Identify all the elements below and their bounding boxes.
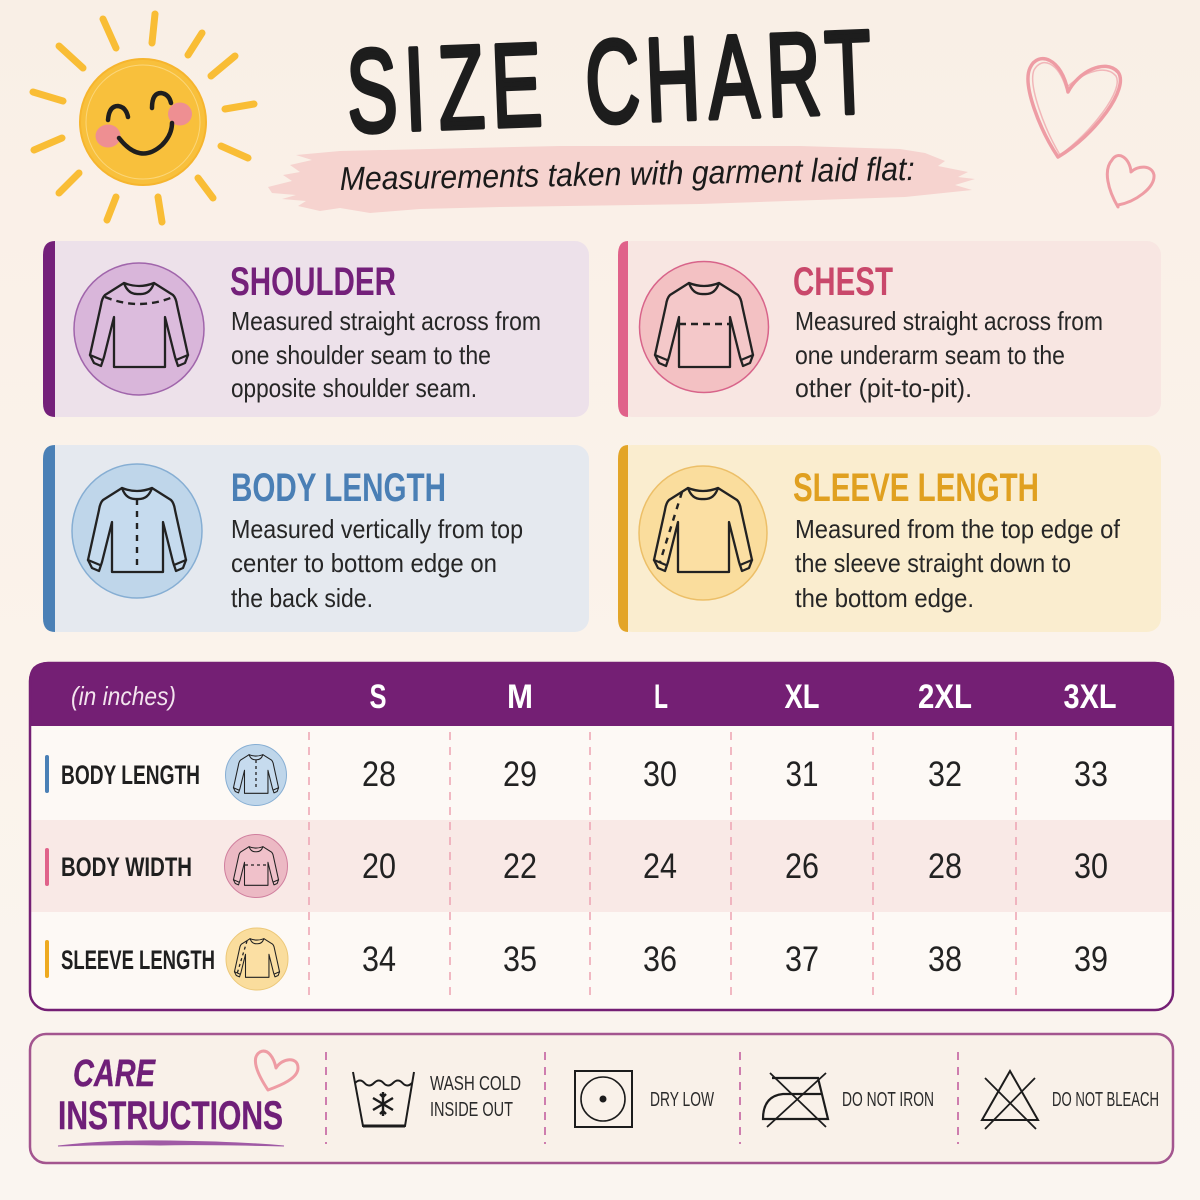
text: chest description: one underarm seam to the (795, 340, 1065, 370)
care: dry low (575, 1071, 714, 1127)
text: body length description: the back side. (231, 583, 373, 613)
text: chest description: Measured straight across from (795, 306, 1103, 336)
text: shoulder description (231, 306, 541, 403)
text: sleeve length description: the sleeve straight down to (795, 548, 1071, 578)
text: body length description (231, 514, 523, 613)
text: shoulder description: Measured straight across from (231, 306, 541, 336)
heading: shoulder: SHOULDER (230, 260, 396, 304)
row: body length: 33 (1074, 755, 1108, 794)
care: wash cold: INSIDE OUT (430, 1099, 513, 1121)
table header row: M (507, 678, 533, 716)
text: body length description: center to bottom edge on (231, 548, 497, 578)
row: body length: BODY LENGTH (61, 760, 200, 790)
heading: care instructions: INSTRUCTIONS (58, 1094, 283, 1138)
row: body length: 31 (786, 755, 818, 794)
row: sleeve length: 34 (362, 940, 396, 979)
row: body length: 29 (503, 755, 537, 794)
text: sleeve length description (795, 514, 1121, 613)
row: sleeve length: 39 (1074, 940, 1108, 979)
text: chest description: other (pit-to-pit). (795, 373, 972, 403)
icon: small heart (1107, 156, 1154, 207)
title: SIZE (344, 18, 544, 157)
care: wash cold (353, 1072, 521, 1126)
row: body width: BODY WIDTH (61, 852, 192, 882)
table header row: S (370, 678, 386, 716)
row: body length (45, 744, 1108, 806)
row: body length: 30 (643, 755, 677, 794)
care: dry low: DRY LOW (650, 1089, 714, 1111)
text: shoulder description: one shoulder seam to the (231, 340, 491, 370)
panel: chest (618, 241, 1161, 417)
row: body width: 24 (643, 847, 677, 886)
heading: body length: BODY LENGTH (231, 466, 446, 510)
row: body width: 28 (928, 847, 962, 886)
panel: sleeve length (618, 445, 1161, 632)
panel: body length (43, 445, 589, 632)
subtitle brush banner (268, 146, 975, 213)
row: sleeve length (45, 928, 1108, 990)
row: sleeve length: 36 (643, 940, 677, 979)
heading: care instructions: CARE (73, 1053, 156, 1095)
heading: chest: CHEST (793, 260, 893, 304)
text: body length description: Measured vertically from top (231, 514, 523, 544)
icon: body length sweater (72, 464, 202, 598)
text: sleeve length description: the bottom edge. (795, 583, 974, 613)
heading: care instructions (58, 1053, 284, 1146)
row: sleeve length: 37 (785, 940, 819, 979)
row: sleeve length: 35 (503, 940, 537, 979)
icon: chest sweater (640, 262, 768, 392)
care: do not iron (763, 1073, 934, 1127)
care: do not bleach (982, 1071, 1159, 1129)
row: body width: 30 (1074, 847, 1108, 886)
heading: sleeve length: SLEEVE LENGTH (793, 466, 1039, 510)
row: body width: 20 (362, 847, 396, 886)
icon: shoulder sweater (74, 263, 204, 395)
text: sleeve length description: Measured from the top edge of (795, 514, 1121, 544)
row: body length: 32 (928, 755, 962, 794)
panel: shoulder (43, 241, 589, 417)
row: body length: 28 (362, 755, 396, 794)
table header row: (in inches) (71, 681, 176, 711)
table header row: XL (784, 678, 820, 716)
table header row: 2XL (918, 678, 972, 716)
row: body width: 22 (503, 847, 537, 886)
icon: sleeve length sweater (639, 466, 767, 600)
icon: care heart (255, 1051, 298, 1090)
row: body width: 26 (785, 847, 819, 886)
size table (29, 662, 1174, 1010)
table header row (71, 678, 1116, 716)
text: chest description (795, 306, 1103, 403)
table header row: 3XL (1064, 678, 1116, 716)
text: shoulder description: opposite shoulder seam. (231, 373, 477, 403)
title: CHART (583, 5, 874, 148)
row: body width (45, 834, 1108, 898)
table header row: L (654, 678, 668, 716)
title (344, 5, 874, 157)
care: wash cold: WASH COLD (430, 1073, 521, 1095)
care: do not iron: DO NOT IRON (842, 1089, 934, 1111)
subtitle: Measurements taken with garment laid flat: (339, 150, 915, 197)
row: sleeve length: SLEEVE LENGTH (61, 945, 215, 975)
row: sleeve length: 38 (928, 940, 962, 979)
icon: smiling sun (33, 14, 254, 222)
panel: care instructions (30, 1034, 1173, 1163)
icon: large heart (1028, 59, 1120, 157)
